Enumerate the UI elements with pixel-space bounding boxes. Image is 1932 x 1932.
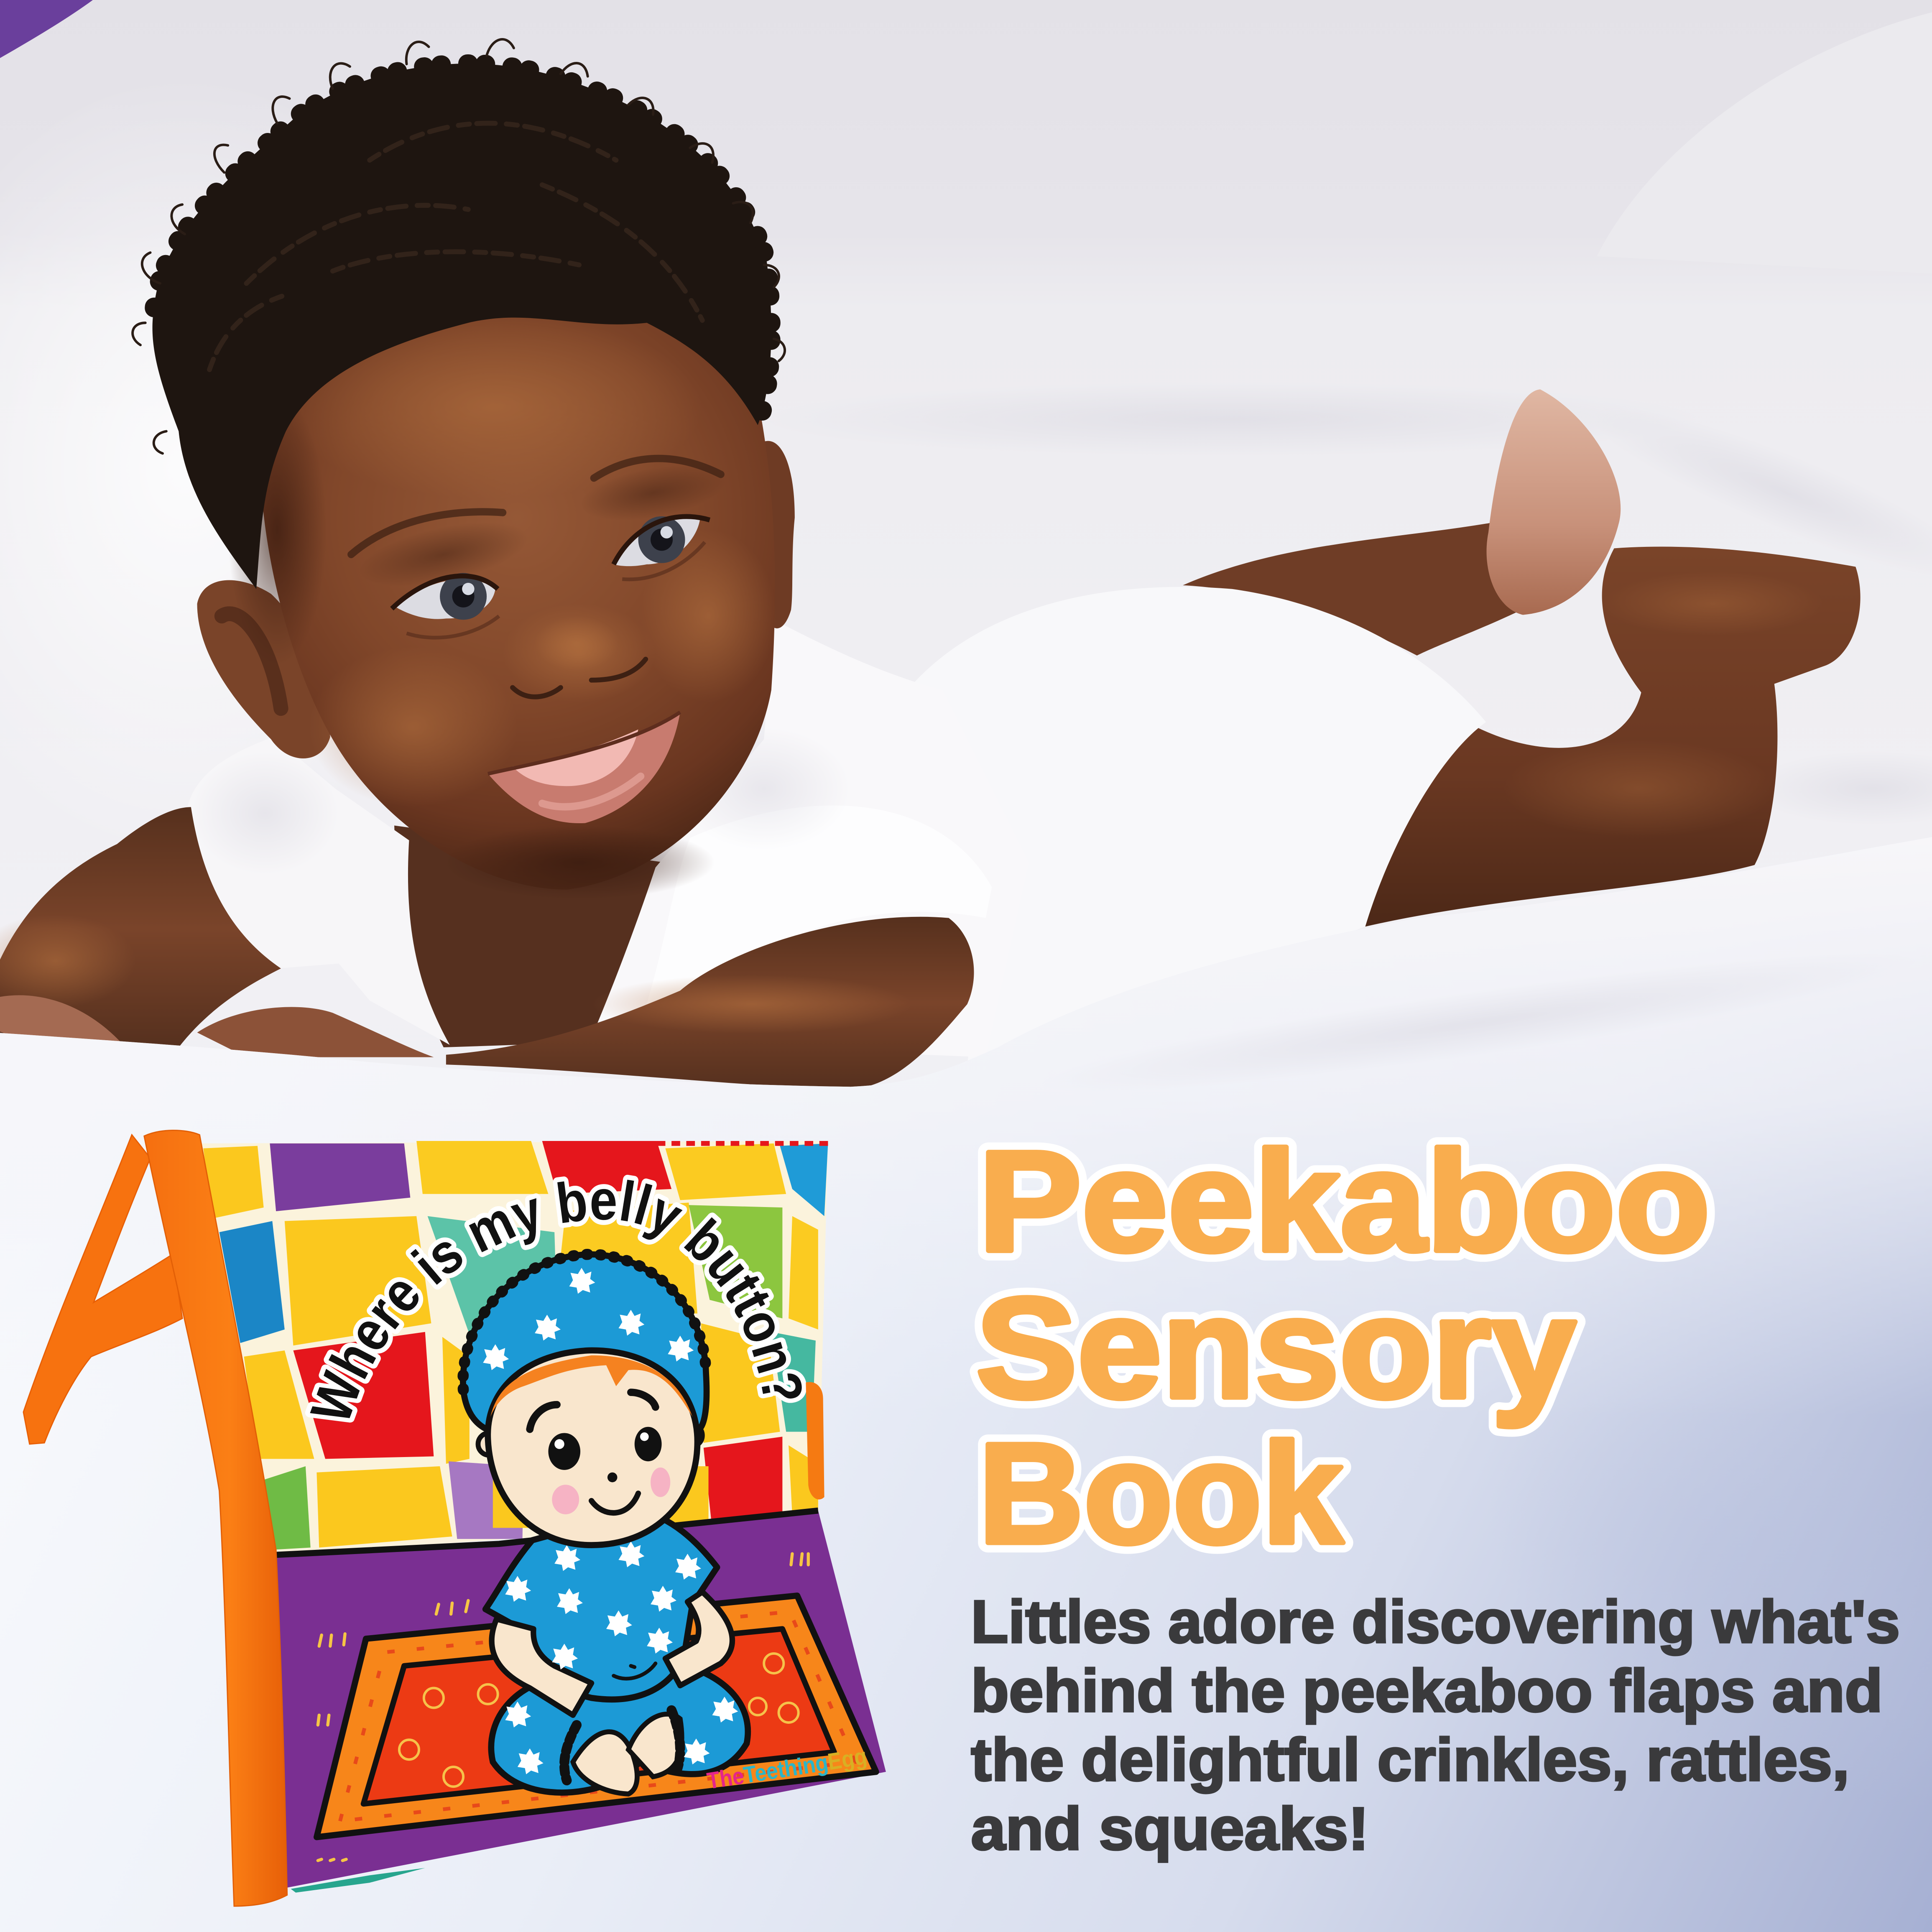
baby left ear xyxy=(197,580,330,758)
baby nose xyxy=(503,604,656,702)
baby near leg xyxy=(1365,547,1861,926)
baby far leg xyxy=(1183,523,1534,656)
product: peekaboo fabric book xyxy=(23,1131,886,1906)
baby right arm xyxy=(446,917,974,1089)
book rug swirls xyxy=(399,1654,799,1787)
baby hair xyxy=(133,39,785,589)
heading: Peekaboo Sensory Book: Sensory xyxy=(976,1268,1577,1429)
shirt snowflakes xyxy=(505,1542,738,1774)
book cover upper background xyxy=(197,1141,828,1555)
book orange rug xyxy=(316,1595,876,1837)
baby cheek highlights xyxy=(228,314,776,899)
baby brows xyxy=(351,512,503,554)
baby right ear xyxy=(756,441,795,628)
illustrated baby feet xyxy=(564,1710,682,1794)
baby raised foot xyxy=(1487,389,1621,615)
baby chest xyxy=(394,826,665,1047)
illustrated baby arms xyxy=(492,1592,732,1715)
book yellow floor marks xyxy=(318,1554,808,1861)
heading: Peekaboo Sensory Book xyxy=(976,1122,1710,1573)
book side tab xyxy=(806,1382,824,1499)
illustrated baby shirt xyxy=(485,1511,717,1700)
book rug border marks xyxy=(340,1612,855,1821)
heading: Peekaboo Sensory Book: Peekaboo xyxy=(978,1122,1710,1281)
illustrated baby eyes and smile xyxy=(530,1392,670,1514)
book red rug centre xyxy=(363,1629,834,1804)
heading: Peekaboo Sensory Book: Book xyxy=(978,1414,1344,1573)
baby diaper xyxy=(912,587,1486,1067)
body text: Littles adore discovering what's xyxy=(971,1587,1900,1655)
illustrated baby belly button xyxy=(614,1664,656,1679)
book brand logo: TheTeethingEgg xyxy=(705,1743,869,1794)
book spine xyxy=(144,1131,287,1906)
book teal page edge xyxy=(291,1868,425,1893)
blanket foreground xyxy=(0,835,1932,1932)
heading: Peekaboo Sensory Book: Sensory xyxy=(976,1268,1577,1429)
book strap loop xyxy=(23,1135,182,1444)
baby face xyxy=(260,294,775,890)
baby onesie xyxy=(187,737,450,1045)
baby right eye xyxy=(614,516,710,579)
baby hand xyxy=(0,995,123,1047)
body text xyxy=(971,1587,1900,1863)
cap snowflakes xyxy=(483,1268,694,1370)
body text: and squeaks! xyxy=(971,1795,1369,1863)
baby left eye xyxy=(392,573,499,638)
baby mouth xyxy=(488,712,680,823)
baby second hand xyxy=(197,1007,434,1057)
baby left arm xyxy=(0,807,281,1050)
heading: Peekaboo Sensory Book: Book xyxy=(978,1414,1344,1573)
book purple floor xyxy=(273,1511,886,1888)
book quilt tiles xyxy=(203,1141,828,1550)
illustrated baby legs xyxy=(491,1664,748,1793)
book title on cover: Where is my belly button? xyxy=(298,1168,816,1431)
illustrated baby cap xyxy=(463,1254,707,1430)
illustrated baby head xyxy=(478,1350,702,1545)
body text: the delightful crinkles, rattles, xyxy=(971,1726,1850,1794)
heading: Peekaboo Sensory Book: Peekaboo xyxy=(978,1122,1710,1281)
body text: behind the peekaboo flaps and xyxy=(971,1656,1883,1724)
